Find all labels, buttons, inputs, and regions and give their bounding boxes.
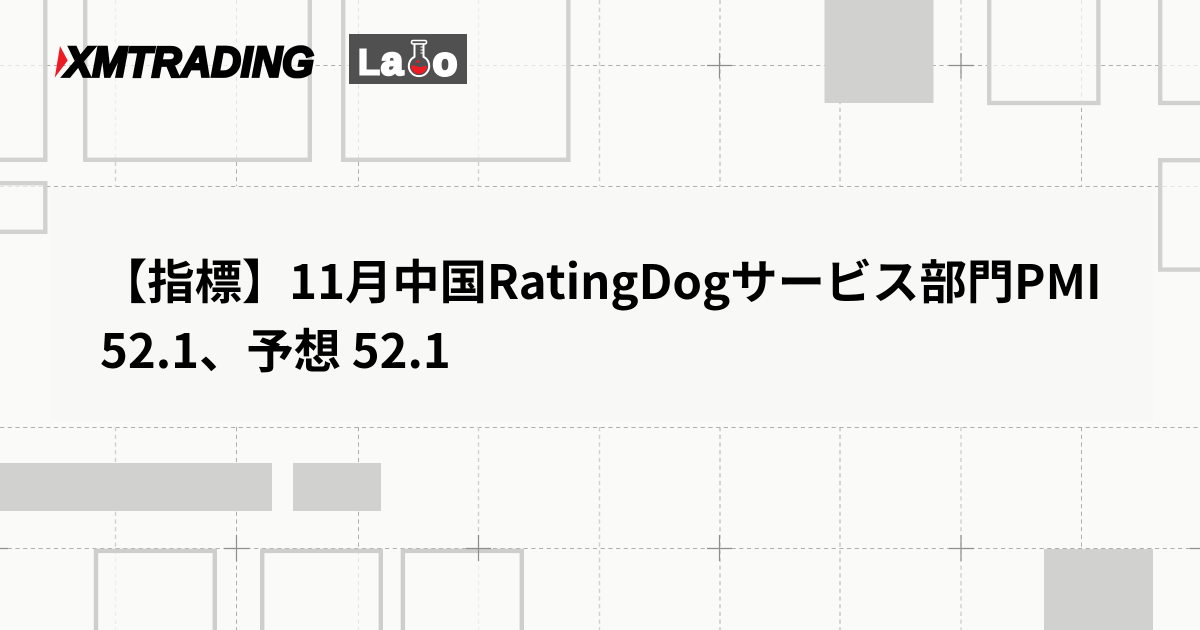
logo: Labo: a xyxy=(381,40,404,84)
content panel xyxy=(50,188,1153,421)
logo: XMTRADING: XMTRADING xyxy=(63,39,314,87)
title xyxy=(100,244,1102,382)
logo: Labo: L xyxy=(358,42,380,82)
logo: Labo: o xyxy=(433,40,457,84)
title: 【指標】11月中国RatingDogサービス部門PMI xyxy=(100,244,1102,313)
logo: Labo xyxy=(349,34,467,84)
icon: flask xyxy=(409,40,429,76)
outlined squares: top row xyxy=(0,0,1200,270)
outlined squares: bottom row xyxy=(96,551,522,630)
title: 52.1、予想 52.1 xyxy=(100,313,451,382)
